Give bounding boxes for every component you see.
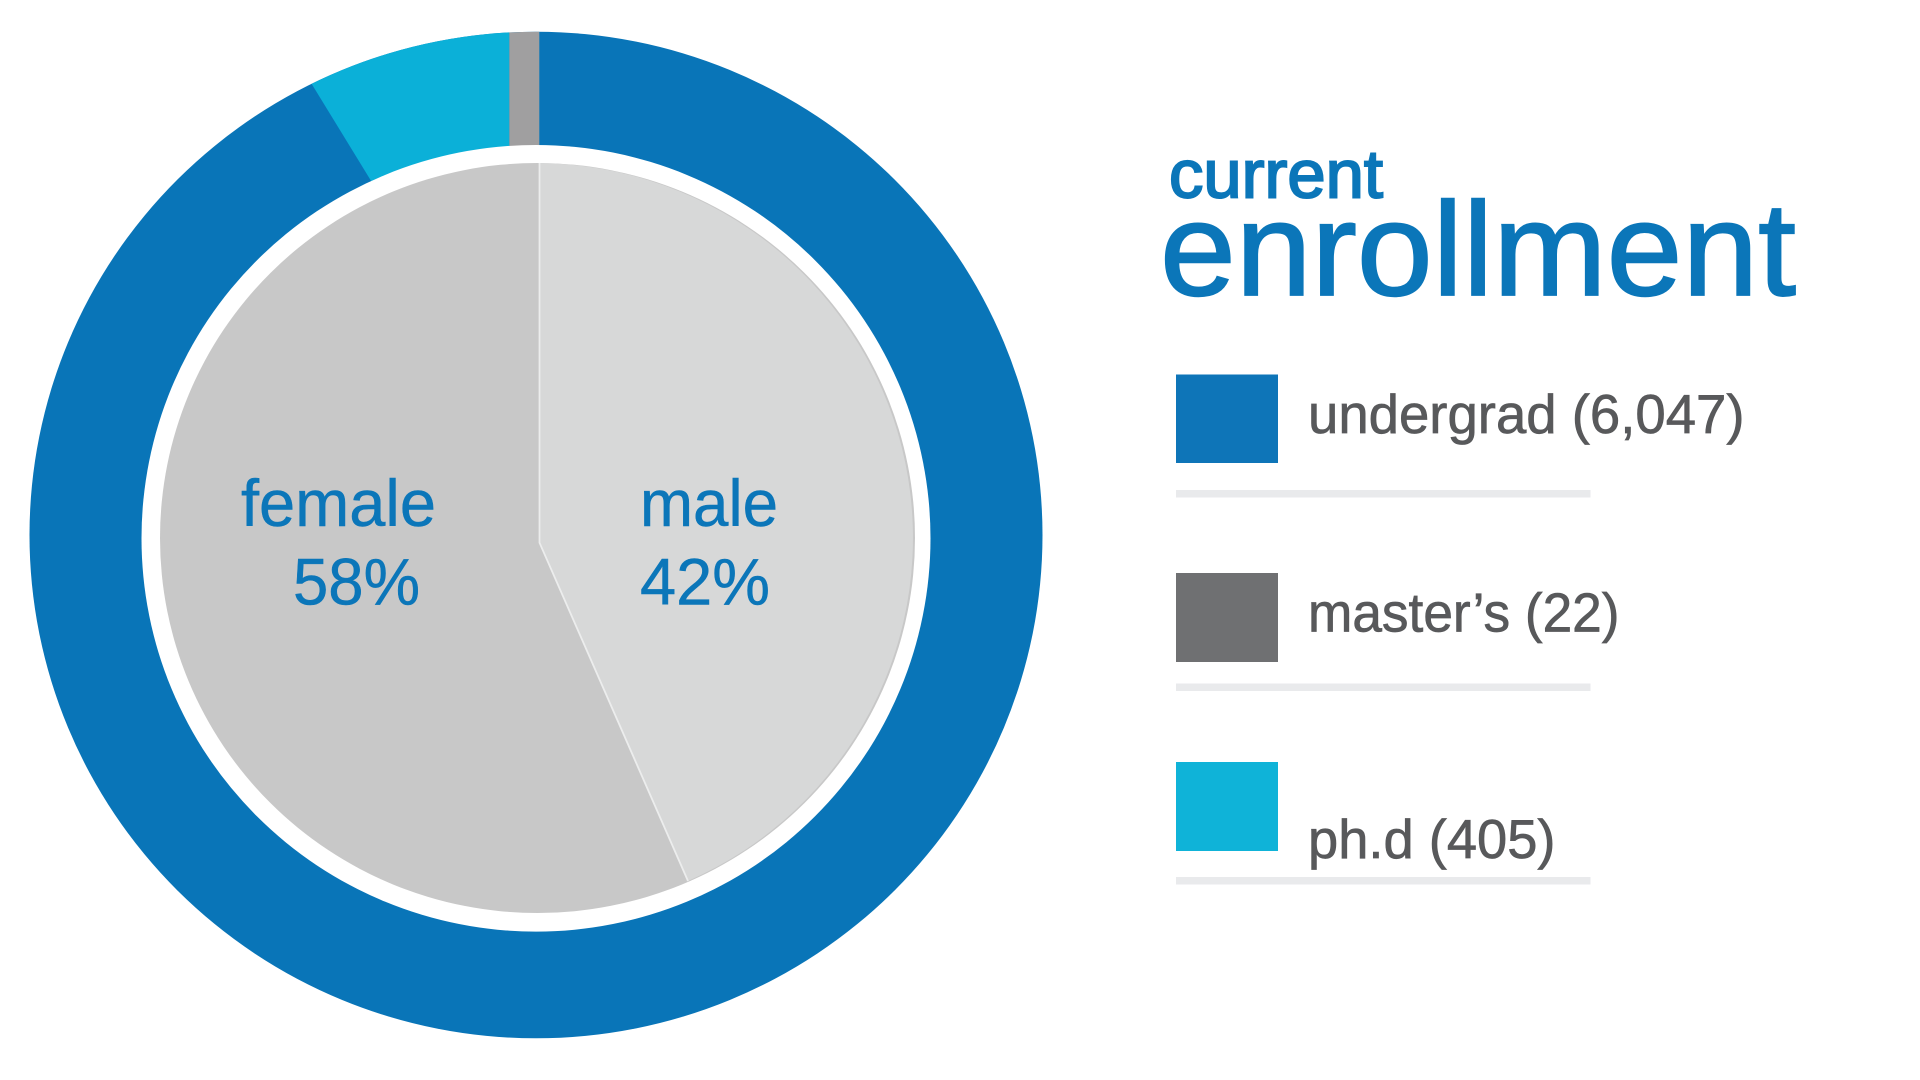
pie divider line: [540, 163, 688, 881]
legend item: ph.d: ph.d (405): [1308, 808, 1556, 870]
label: male 42%: 42%: [640, 544, 770, 618]
label: male 42%: male: [640, 466, 778, 540]
legend item: undergrad: [1176, 374, 1744, 498]
label: male 42%: [640, 466, 778, 618]
outer ring: ph.d segment: [312, 32, 510, 181]
title: current enrollment: current: [1169, 136, 1383, 212]
legend item: master's: master’s (22): [1308, 582, 1620, 644]
label: female 58%: [241, 466, 436, 618]
inner pie: female segment: [160, 163, 915, 913]
inner pie: male segment: [540, 163, 913, 881]
outer ring: master's segment: [509, 32, 540, 146]
outer ring: undergrad segment: [30, 32, 1042, 1038]
donut chart: degree level and gender: [30, 10, 1042, 1038]
white gap between ring and pie: [142, 145, 930, 932]
title: current enrollment: enrollment: [1160, 176, 1796, 324]
legend item: undergrad: undergrad (6,047): [1308, 383, 1744, 445]
label: female 58%: female: [241, 466, 436, 540]
label: female 58%: 58%: [293, 544, 420, 618]
legend item: ph.d: [1176, 762, 1590, 884]
legend: [1176, 374, 1744, 884]
legend item: master's: [1176, 573, 1620, 691]
